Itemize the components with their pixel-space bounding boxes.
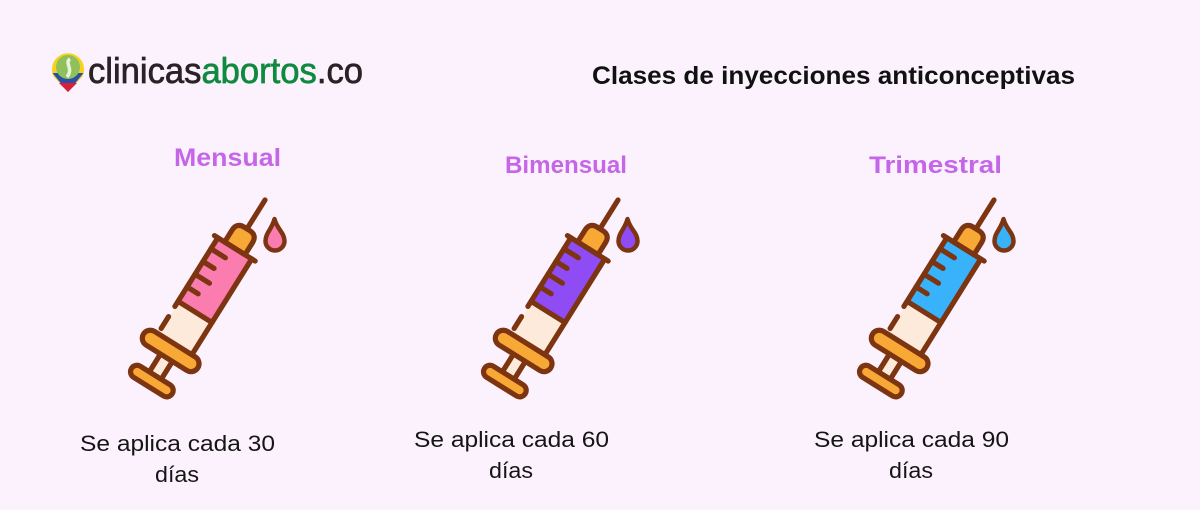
icon: pink syringe <box>121 183 292 404</box>
text: Se aplica cada 30 días <box>80 431 275 487</box>
text: Se aplica cada 90 días: Se aplica cada 90 <box>814 427 1009 452</box>
text: Se aplica cada 30 días: Se aplica cada 30 <box>80 431 275 456</box>
heading: Mensual: Mensual <box>174 144 281 172</box>
icon: purple syringe <box>474 183 645 404</box>
icon: pink drop <box>266 219 284 250</box>
panel: bimensual <box>414 152 645 483</box>
icon: location pin <box>52 53 84 92</box>
text: Se aplica cada 90 días: días <box>889 458 933 483</box>
logo wordmark: clinicasabortos.co <box>88 50 363 91</box>
text: Se aplica cada 90 días <box>814 427 1009 483</box>
text: Se aplica cada 60 días <box>414 427 609 483</box>
heading: Bimensual: Bimensual <box>505 152 627 179</box>
text: Se aplica cada 60 días: Se aplica cada 60 <box>414 427 609 452</box>
text: Se aplica cada 30 días: días <box>155 462 199 487</box>
panel: trimestral <box>814 152 1021 483</box>
panel: mensual <box>80 144 292 487</box>
heading: Trimestral: Trimestral <box>869 152 1002 179</box>
icon: purple drop <box>618 219 638 250</box>
icon: blue drop <box>994 219 1014 250</box>
text: Se aplica cada 60 días: días <box>489 458 533 483</box>
title: Clases de inyecciones anticonceptivas <box>592 62 1075 90</box>
logo: clinicasabortos.co <box>52 50 363 92</box>
icon: blue syringe <box>850 183 1021 404</box>
